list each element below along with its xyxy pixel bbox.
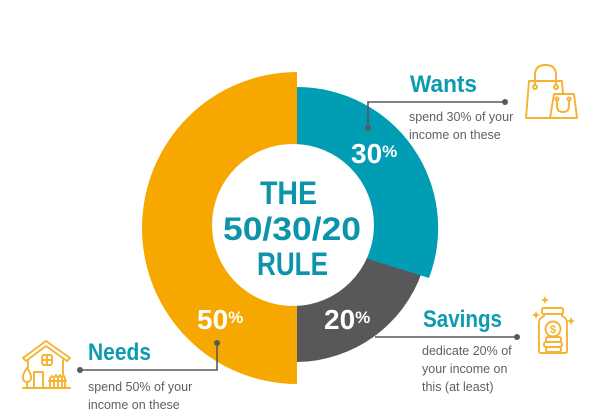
label: 20%: 20 [324, 304, 355, 335]
connector: savings [375, 334, 520, 340]
segment: needs 50% [142, 72, 297, 384]
label: 30%: 30 [351, 138, 382, 169]
text block: needs: spend 50% of your [88, 380, 192, 394]
text block: savings [422, 306, 512, 394]
label: 20%: % [355, 308, 370, 327]
segment: wants 30% [297, 87, 438, 278]
icon: money jar [532, 296, 575, 353]
title [223, 175, 361, 282]
icon: money jar: $ [550, 324, 556, 336]
text block: wants: income on these [409, 128, 501, 142]
text block: savings: this (at least) [422, 380, 494, 394]
segment: savings 20% [297, 225, 422, 362]
title: RULE [257, 246, 328, 282]
text block: wants [409, 71, 513, 142]
text block: wants: Wants [410, 71, 477, 98]
label: 30%: % [382, 142, 397, 161]
title: 50/30/20 [223, 211, 361, 247]
icon: shopping bags [526, 65, 577, 118]
label: 50%: % [228, 308, 243, 327]
text block: savings: your income on [422, 362, 508, 376]
label: 50%: 50 [197, 304, 228, 335]
connector: needs [77, 340, 220, 373]
connector: wants [365, 99, 508, 131]
text block: needs [88, 339, 192, 410]
center circle [212, 144, 374, 306]
text block: savings: Savings [423, 306, 502, 333]
text block: needs: Needs [88, 339, 151, 366]
donut chart [142, 72, 438, 384]
text block: wants: spend 30% of your [409, 110, 513, 124]
title: THE [260, 175, 317, 211]
icon: house [23, 341, 70, 388]
text block: savings: dedicate 20% of [422, 344, 512, 358]
